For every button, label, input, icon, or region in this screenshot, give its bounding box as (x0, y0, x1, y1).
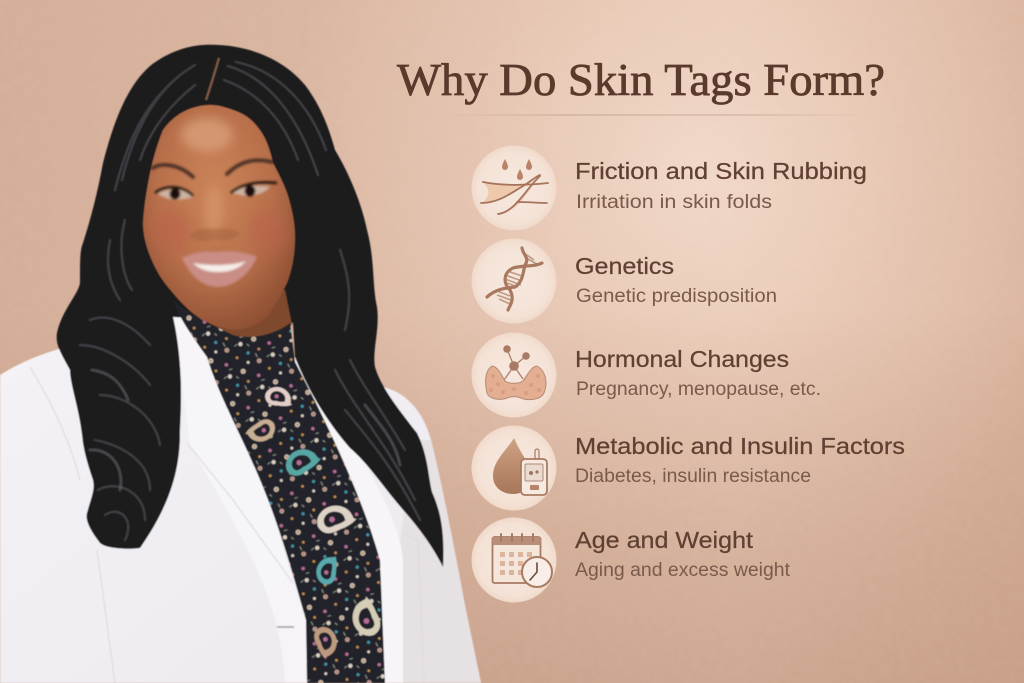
icon: blood drop and glucose meter (472, 426, 556, 510)
item: age and weight (472, 518, 791, 602)
item: genetics (472, 238, 777, 324)
neck (192, 290, 292, 340)
heading: Friction and Skin Rubbing (575, 158, 867, 184)
eyes (155, 182, 277, 200)
icon: DNA helix (472, 238, 556, 324)
heading: Genetics (575, 253, 674, 279)
icon: thyroid gland with molecule (472, 332, 556, 418)
hair (57, 45, 443, 567)
face (143, 105, 295, 330)
title divider line (440, 114, 870, 116)
smile (182, 251, 257, 287)
item: friction and skin rubbing (472, 146, 867, 230)
eyebrows (153, 160, 272, 177)
heading: Metabolic and Insulin Factors (575, 433, 905, 459)
item: metabolic and insulin factors (472, 426, 905, 510)
heading: Hormonal Changes (575, 346, 789, 372)
description: Aging and excess weight (575, 560, 791, 581)
description: Pregnancy, menopause, etc. (576, 379, 821, 400)
title: Why Do Skin Tags Form? (397, 55, 885, 105)
white coat (0, 300, 481, 683)
portrait: smiling doctor in white coat (0, 45, 481, 683)
heading: Age and Weight (575, 527, 754, 553)
description: Genetic predisposition (576, 286, 777, 307)
description: Diabetes, insulin resistance (575, 466, 811, 487)
icon: skin folds with sweat drops (472, 146, 556, 230)
description: Irritation in skin folds (576, 192, 772, 213)
scarf: paisley print blouse (173, 300, 390, 683)
item: hormonal changes (472, 332, 821, 418)
icon: calendar and clock (472, 518, 556, 602)
nose (190, 229, 240, 241)
hair part line (206, 58, 219, 100)
